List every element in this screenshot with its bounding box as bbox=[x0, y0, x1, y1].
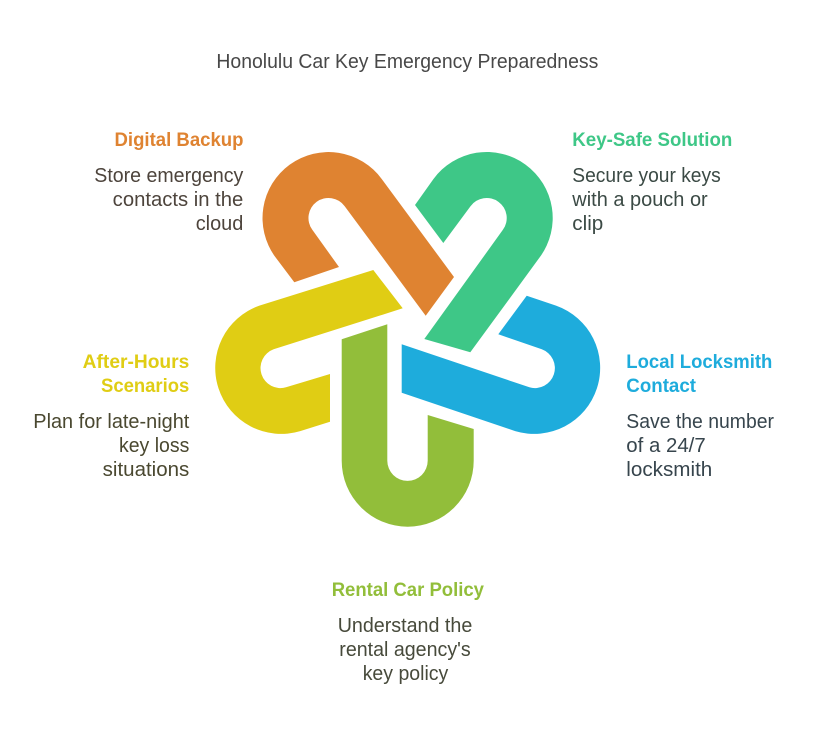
description: rental car policy: rental agency's bbox=[339, 639, 471, 661]
description: after-hours scenarios: situations bbox=[103, 459, 189, 481]
text block: key-safe solution bbox=[571, 130, 732, 235]
description: key-safe solution: with a pouch or bbox=[571, 189, 708, 211]
description: key-safe solution: clip bbox=[572, 213, 603, 235]
description: key-safe solution bbox=[571, 165, 721, 235]
description: rental car policy bbox=[338, 615, 472, 685]
description: after-hours scenarios: Plan for late-night bbox=[33, 411, 190, 433]
chain diagram bbox=[215, 152, 600, 527]
description: key-safe solution: Secure your keys bbox=[572, 165, 721, 187]
heading: local locksmith contact bbox=[626, 352, 772, 397]
title: Honolulu Car Key Emergency Preparedness bbox=[216, 51, 598, 73]
link: local locksmith contact (blue) bbox=[402, 296, 600, 434]
heading: local locksmith contact: Local Locksmith bbox=[626, 352, 772, 373]
description: local locksmith contact: locksmith bbox=[626, 459, 712, 481]
heading: after-hours scenarios: Scenarios bbox=[101, 376, 189, 397]
description: digital backup: contacts in the bbox=[113, 189, 243, 211]
heading: after-hours scenarios: After-Hours bbox=[83, 352, 189, 373]
description: local locksmith contact bbox=[626, 411, 774, 481]
heading: digital backup: Digital Backup bbox=[114, 130, 244, 151]
heading: key-safe solution: Key-Safe Solution bbox=[572, 130, 732, 151]
description: after-hours scenarios bbox=[33, 411, 190, 481]
description: local locksmith contact: of a 24/7 bbox=[626, 435, 706, 457]
description: digital backup: Store emergency bbox=[94, 165, 243, 187]
text block: local locksmith contact bbox=[626, 352, 774, 481]
heading: rental car policy: Rental Car Policy bbox=[332, 580, 484, 601]
link: after-hours scenarios (yellow) bbox=[215, 270, 403, 434]
link: rental car policy (lime) bbox=[342, 324, 474, 527]
text block: after-hours scenarios bbox=[33, 352, 190, 481]
heading: after-hours scenarios bbox=[83, 352, 189, 397]
description: digital backup bbox=[94, 165, 243, 235]
description: after-hours scenarios: key loss bbox=[119, 435, 189, 457]
heading: local locksmith contact: Contact bbox=[626, 376, 697, 397]
text block: rental car policy bbox=[332, 580, 484, 685]
description: digital backup: cloud bbox=[196, 213, 243, 235]
description: rental car policy: Understand the bbox=[338, 615, 472, 637]
description: local locksmith contact: Save the number bbox=[626, 411, 774, 433]
link: key-safe solution (green) bbox=[415, 152, 553, 352]
text block: digital backup bbox=[94, 130, 244, 235]
description: rental car policy: key policy bbox=[363, 663, 448, 685]
link: digital backup (orange) bbox=[263, 152, 454, 316]
